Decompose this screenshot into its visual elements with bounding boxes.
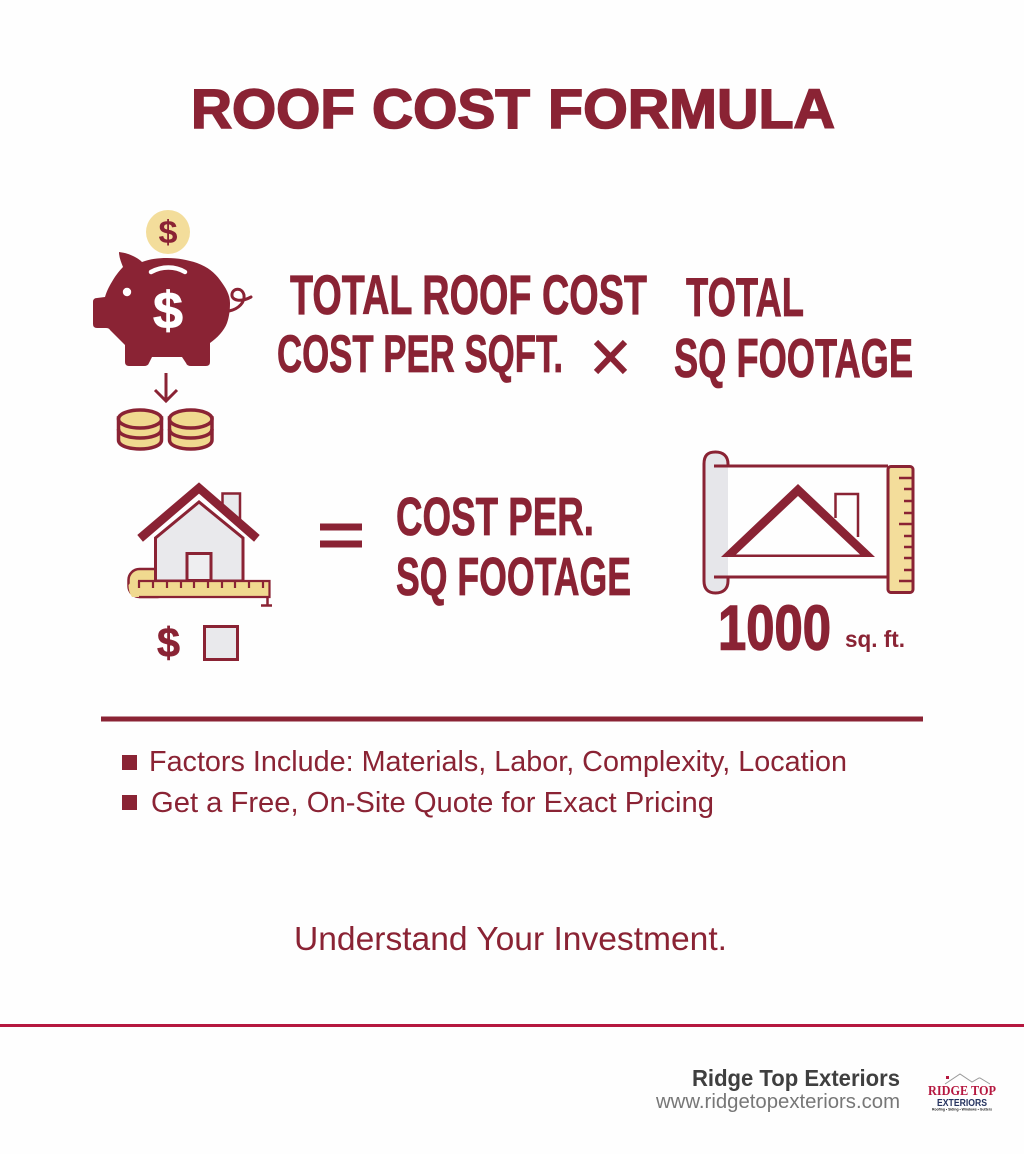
icon: falling dollar coin: $	[158, 214, 178, 250]
label: cost per: COST PER.	[396, 487, 594, 547]
icon: square	[204, 626, 238, 660]
icon: piggy bank	[93, 252, 251, 366]
scroll roll	[704, 452, 728, 593]
chimney	[836, 494, 858, 537]
bullet 2: Get a Free, On-Site Quote for Exact Pricing	[151, 787, 714, 819]
icon: down arrow	[155, 373, 177, 401]
icon: falling dollar coin	[146, 210, 190, 254]
icon: coin stacks	[118, 410, 212, 449]
formula: total roof cost: TOTAL ROOF COST	[290, 263, 647, 326]
roof triangle	[721, 484, 875, 557]
title: COST	[372, 77, 530, 140]
formula: cost per sqft: COST PER SQFT.	[277, 325, 563, 384]
sheet edges	[714, 466, 888, 577]
label: sq footage: SQ FOOTAGE	[396, 547, 631, 607]
equals sign	[320, 527, 362, 544]
door	[187, 554, 211, 580]
ruler	[888, 466, 913, 592]
tape hook	[261, 597, 272, 606]
tape band	[128, 581, 270, 597]
footer rule	[0, 1024, 1024, 1027]
logo: RIDGE TOP	[928, 1084, 996, 1099]
tagline: Understand Your Investment.	[294, 920, 727, 957]
icon: piggy bank with coin and coins	[93, 210, 251, 449]
divider	[101, 716, 923, 722]
footer brand name: Ridge Top Exteriors	[692, 1065, 900, 1091]
tape curl	[128, 569, 168, 597]
roof	[138, 483, 259, 541]
chimney	[222, 494, 240, 525]
multiply sign	[596, 342, 625, 372]
tape outline and ticks	[138, 581, 270, 597]
footer url: www.ridgetopexteriors.com	[655, 1090, 900, 1113]
icon: piggy bank: $	[153, 282, 183, 340]
house body	[156, 502, 243, 581]
icon: house with tape measure	[128, 483, 272, 606]
title: ROOF	[191, 77, 355, 140]
logo: Roofing • Siding • Windows • Gutters	[932, 1106, 993, 1112]
sq. ft. unit: sq. ft.	[845, 626, 905, 652]
icon: dollar sign: $	[157, 619, 180, 666]
title	[191, 77, 835, 140]
1000 value: 1000	[718, 594, 831, 664]
icon: blueprint scroll with roof and ruler	[704, 452, 913, 593]
title: FORMULA	[548, 77, 835, 140]
bullet 1: Factors Include: Materials, Labor, Complexity, Location	[149, 746, 847, 778]
formula: total: TOTAL	[686, 266, 804, 328]
logo: EXTERIORS	[937, 1098, 987, 1109]
bullet list	[122, 746, 847, 819]
logo	[928, 1074, 996, 1112]
